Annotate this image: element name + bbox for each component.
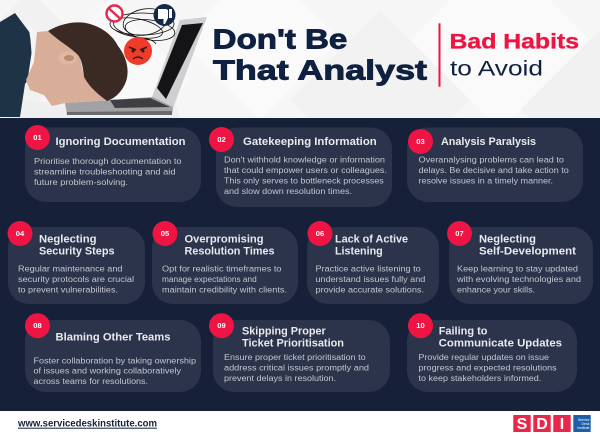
panel: 01 Ignoring Documentation [25,125,201,202]
text 06 [316,265,425,294]
icon: prohibited sign [106,6,122,22]
text 04: Regular maintenance and [18,265,122,274]
text 05: maintain credibility with clients. [162,286,287,294]
SDI logo: S [517,416,528,433]
text 02 [224,156,387,196]
panel: 05 Overpromising Resolution Times [152,221,298,304]
text 04: to prevent vulnerabilities. [18,286,118,294]
heading 09 [242,325,344,349]
SDI logo [513,415,591,433]
text 03: Overanalysing problems can lead to [418,156,565,164]
illustration: frustrated analyst with head on laptop [0,4,207,118]
badge 02 [209,127,234,152]
text 03 [418,156,569,186]
SDI logo: Desk [582,422,590,426]
badge 10 [408,313,433,338]
badge 04: 04 [16,229,25,238]
heading 10: Failing to [439,325,488,337]
badge 03 [408,129,433,154]
heading 09: Ticket Prioritisation [242,337,344,349]
text 01: streamline troubleshooting and aid [34,168,176,176]
SDI logo: Service [578,418,590,422]
heading 04: Neglecting [39,234,96,246]
text 04: security protocols are crucial [18,275,134,284]
text 07: enhance your skills. [457,286,535,294]
text 08: Foster collaboration by taking ownership [34,356,197,365]
heading 10: Communicate Updates [439,337,562,349]
badge 09 [209,313,234,338]
divider [438,23,440,87]
shirt collar [28,23,37,77]
panel: 08 Blaming Other Teams [25,313,201,392]
panel: 02 Gatekeeping Information [209,127,392,207]
heading 05: Resolution Times [184,246,274,258]
desk surface [10,102,180,118]
panel: 04 Neglecting Security Steps [8,221,145,304]
heading 04: Security Steps [39,246,114,258]
heading 05: Overpromising [184,234,264,246]
text 06: understand issues fully and [316,275,425,284]
badge 01: 01 [33,133,42,142]
badge 05: 05 [161,229,170,238]
text 01 [34,157,182,187]
laptop screen [152,17,207,108]
panel: 10 Failing to Communicate Updates [407,313,577,392]
text 09 [224,353,369,383]
text 07: with evolving technologies and [456,275,581,284]
heading 03: Analysis Paralysis [441,136,536,148]
text 10: Provide regular updates on issue [418,353,550,362]
heading 06: Lack of Active [335,234,408,246]
text 07: Keep learning to stay updated [457,265,578,274]
text 01: Prioritise thorough documentation to [34,157,182,166]
title: Don't Be [213,23,347,54]
text 03: delays. Be decisive and take action to [418,166,569,175]
text 09: address critical issues promptly and [224,364,369,372]
text 10 [418,353,557,383]
text 10: to keep stakeholders informed. [418,374,541,383]
text 02: that could empower users or colleagues. [224,166,387,175]
heading 09: Skipping Proper [242,325,326,337]
hair [48,22,128,101]
badge 08 [25,313,50,338]
text 08: across teams for resolutions. [34,377,148,386]
heading 07: Neglecting [479,234,536,246]
text 02: This only serves to bottleneck processes [224,176,384,186]
badge 09: 09 [217,321,226,330]
text 01: future problem-solving. [34,178,128,187]
text 02: Don't withhold knowledge or information [224,156,385,164]
badge 05 [152,221,178,246]
website link: www.servicedeskinstitute.com [17,419,157,430]
footer [0,411,600,436]
heading 06: Listening [335,246,383,258]
title: That Analyst [213,54,427,85]
heading 07: Self-Development [479,246,576,258]
face and neck [26,31,107,106]
badge 07: 07 [455,229,464,238]
badge 10: 10 [416,321,425,330]
text 10: progress and expected resolutions [418,364,557,372]
badge 02: 02 [217,135,226,144]
title [213,23,427,85]
text 09: prevent delays in resolution. [224,374,336,383]
badge 08: 08 [33,321,42,330]
text 07 [456,265,581,294]
text 09: Ensure proper ticket prioritisation to [224,353,366,362]
scribble [110,5,176,44]
subtitle: to Avoid [450,58,543,81]
text 06: Practice active listening to [316,265,421,274]
heading 04 [39,234,114,258]
text 02: and slow down resolution times. [224,187,352,196]
text 08: of issues and working collaboratively [34,367,181,376]
text 08 [34,356,197,386]
badge 06: 06 [316,229,324,238]
panel: 09 Skipping Proper Ticket Prioritisation [209,313,390,392]
badge 01 [25,125,50,150]
badge 07 [447,221,472,246]
text 05: manage expectations and [162,275,257,284]
text 05 [162,265,287,294]
subtitle: Bad Habits [450,30,579,53]
text 03: resolve issues in a timely manner. [418,176,553,186]
heading 05 [184,234,274,258]
SDI logo: Institute [577,426,590,430]
panel: 03 Analysis Paralysis [407,128,583,202]
panel: 07 Neglecting Self-Development [447,221,593,304]
heading 08: Blaming Other Teams [56,332,170,344]
text 06: provide accurate solutions. [316,286,424,294]
icon: angry face [124,37,152,65]
heading 06 [335,234,408,258]
laptop base [65,97,173,115]
heading 02: Gatekeeping Information [243,136,377,148]
text 05: Opt for realistic timeframes to [162,265,282,274]
badge 03: 03 [416,137,425,146]
SDI logo: I [560,416,564,433]
dark content band [0,118,600,411]
subtitle [450,30,579,81]
text 04 [18,265,134,294]
panel: 06 Lack of Active Listening [307,221,439,304]
SDI logo: D [536,416,548,433]
heading 07 [479,234,576,258]
heading 10 [439,325,562,349]
suit [0,13,33,117]
icon: thumbs down [154,4,176,26]
ear [58,52,78,64]
heading 01: Ignoring Documentation [56,136,186,148]
